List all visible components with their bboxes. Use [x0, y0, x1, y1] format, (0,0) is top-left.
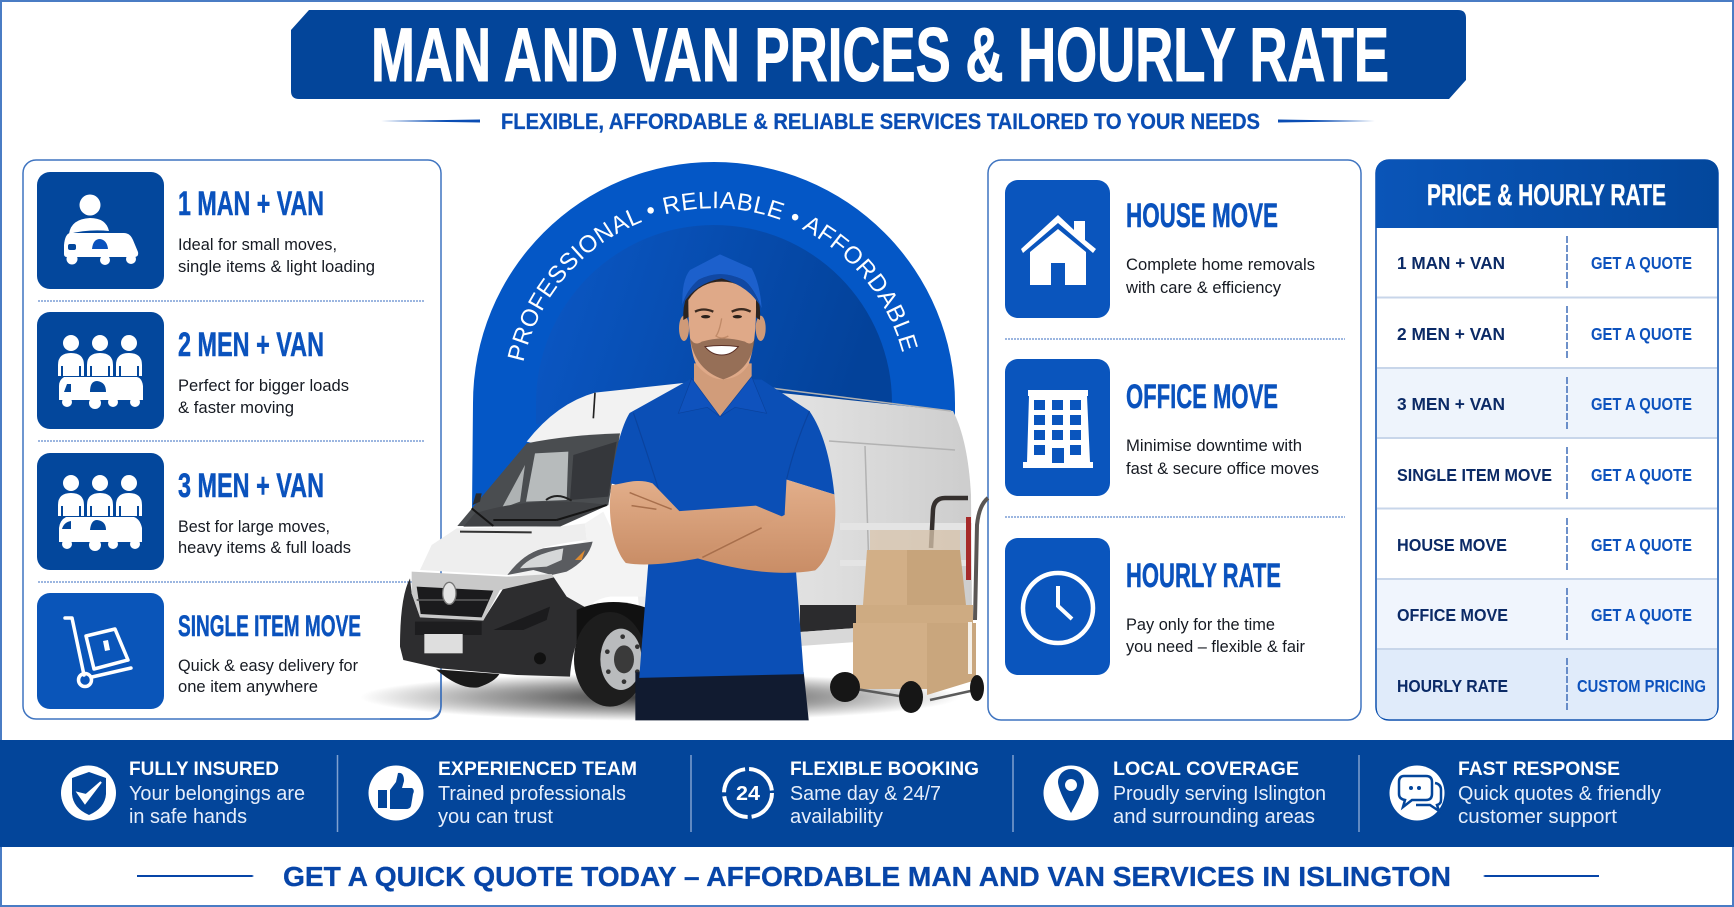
table header	[1376, 160, 1718, 228]
row: hourly rate: HOURLY RATE	[1397, 676, 1508, 696]
service: house move	[1005, 180, 1315, 318]
row: house move: HOUSE MOVE	[1397, 535, 1507, 555]
service: 3 men + van: 3 MEN + VAN	[178, 467, 324, 505]
van cab and front	[400, 383, 687, 707]
subtitle: FLEXIBLE, AFFORDABLE & RELIABLE SERVICES TAILORED TO YOUR NEEDS	[501, 109, 1260, 134]
service: 3 men + van: Best for large moves,	[178, 517, 330, 536]
ground shadow	[360, 673, 960, 721]
service: office move: fast & secure office moves	[1126, 459, 1319, 478]
service: 2 men + van: 2 MEN + VAN	[178, 326, 324, 364]
price table	[1376, 160, 1718, 720]
benefit: flexible booking: 24	[736, 783, 761, 805]
arch backdrop with tagline	[472, 162, 955, 508]
row: hourly rate: CUSTOM PRICING	[1577, 676, 1706, 696]
service: house move: Complete home removals	[1126, 255, 1315, 274]
benefit: flexible booking	[724, 758, 979, 828]
service: house move: HOUSE MOVE	[1126, 197, 1278, 235]
service: 2 men + van: & faster moving	[178, 398, 294, 417]
benefit: fully insured: FULLY INSURED	[129, 758, 279, 780]
benefit: fast response: customer support	[1458, 806, 1617, 828]
arch backdrop with tagline: PROFESSIONAL • RELIABLE • AFFORDABLE	[508, 192, 918, 361]
service: hourly rate	[1005, 538, 1305, 675]
row: house move: GET A QUOTE	[1591, 535, 1692, 555]
benefit: local coverage: Proudly serving Islington	[1113, 783, 1326, 805]
call to action: GET A QUICK QUOTE TODAY – AFFORDABLE MAN AND VAN SERVICES IN ISLINGTON	[283, 861, 1451, 892]
service: 2 men + van	[37, 312, 349, 429]
row: 1 man + van: GET A QUOTE	[1591, 253, 1692, 273]
service: hourly rate: HOURLY RATE	[1126, 557, 1281, 595]
row: hourly rate	[1397, 676, 1706, 696]
service: 3 men + van: heavy items & full loads	[178, 538, 351, 557]
row: 2 men + van	[1397, 324, 1692, 344]
service: house move: with care & efficiency	[1125, 278, 1281, 297]
service: single item move: SINGLE ITEM MOVE	[178, 610, 361, 643]
row: office move: GET A QUOTE	[1591, 605, 1692, 625]
benefit: local coverage: and surrounding areas	[1113, 806, 1315, 828]
service: hourly rate: you need – flexible & fair	[1126, 637, 1305, 656]
benefits band	[0, 740, 1734, 847]
benefit: fast response: FAST RESPONSE	[1458, 758, 1620, 780]
benefit: fast response	[1390, 758, 1661, 828]
service: single item move	[37, 593, 361, 709]
row: single item move: GET A QUOTE	[1591, 465, 1692, 485]
service: 3 men + van	[37, 453, 351, 570]
row: 3 men + van: GET A QUOTE	[1591, 394, 1692, 414]
benefit: experienced team: EXPERIENCED TEAM	[438, 758, 637, 780]
benefit: local coverage	[1044, 758, 1326, 828]
service: 1 man + van: single items & light loading	[178, 257, 375, 276]
benefit: fully insured: in safe hands	[129, 806, 247, 828]
row: 3 men + van: 3 MEN + VAN	[1397, 394, 1505, 414]
row: single item move: SINGLE ITEM MOVE	[1397, 465, 1552, 485]
service: single item move: one item anywhere	[178, 677, 318, 696]
panel: van services	[23, 160, 441, 719]
service: 1 man + van: 1 MAN + VAN	[178, 185, 324, 223]
row: 1 man + van: 1 MAN + VAN	[1397, 253, 1505, 273]
van rear body	[620, 383, 972, 646]
row: 2 men + van: 2 MEN + VAN	[1397, 324, 1505, 344]
benefit: fast response: Quick quotes & friendly	[1458, 783, 1661, 805]
benefit: experienced team	[368, 758, 637, 828]
benefit: experienced team: you can trust	[438, 806, 553, 828]
service: office move	[1005, 359, 1319, 496]
row: office move: OFFICE MOVE	[1397, 605, 1508, 625]
service: 1 man + van	[37, 172, 375, 289]
panel: move types	[988, 160, 1361, 720]
row: single item move	[1397, 465, 1692, 485]
service: 2 men + van: Perfect for bigger loads	[178, 376, 349, 395]
benefit: fully insured	[61, 758, 305, 828]
benefit: local coverage: LOCAL COVERAGE	[1113, 758, 1299, 780]
benefit: flexible booking: Same day & 24/7	[790, 783, 941, 805]
illustration: van	[400, 383, 972, 707]
service: hourly rate: Pay only for the time	[1126, 615, 1275, 634]
row: 1 man + van	[1397, 253, 1692, 273]
head and cap	[678, 254, 767, 417]
row: office move	[1397, 605, 1692, 625]
service: office move: Minimise downtime with	[1126, 436, 1302, 455]
row: house move	[1397, 535, 1692, 555]
benefit: flexible booking: FLEXIBLE BOOKING	[790, 758, 979, 780]
benefit: flexible booking: availability	[790, 806, 883, 828]
service: 1 man + van: Ideal for small moves,	[178, 235, 337, 254]
boxes on hand trolley	[830, 498, 988, 713]
mover in blue polo	[610, 254, 835, 720]
service: single item move: Quick & easy delivery for	[178, 656, 358, 675]
benefit: fully insured: Your belongings are	[129, 783, 305, 805]
row: 3 men + van	[1397, 394, 1692, 414]
service: office move: OFFICE MOVE	[1126, 378, 1278, 416]
row: 2 men + van: GET A QUOTE	[1591, 324, 1692, 344]
benefit: experienced team: Trained professionals	[438, 783, 626, 805]
